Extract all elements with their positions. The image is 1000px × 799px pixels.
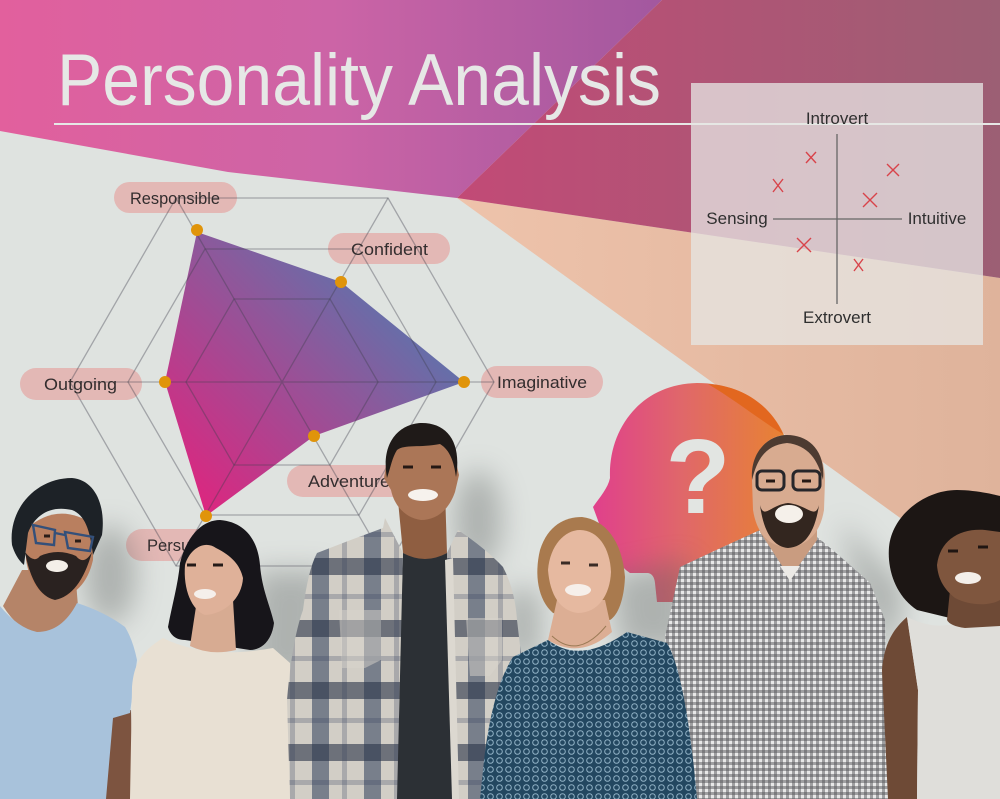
eyes [561, 563, 598, 565]
radar area [165, 232, 464, 516]
background panel: pink banner [0, 0, 662, 198]
wall shadows [84, 470, 905, 680]
quadrant labels: Extrovert [803, 308, 871, 327]
placket [445, 558, 459, 799]
pockets [339, 610, 502, 676]
title: Personality Analysis [57, 40, 661, 121]
background panel: crimson wedge [457, 0, 1000, 278]
radar labels [44, 189, 587, 555]
face [25, 514, 94, 599]
radar label pills [20, 182, 603, 561]
neck [3, 570, 78, 634]
radar labels: Outgoing [44, 375, 117, 394]
beard [760, 503, 819, 548]
radar labels: Responsible [130, 189, 220, 208]
neck [947, 590, 1000, 628]
eyes [187, 564, 223, 566]
neck [190, 600, 236, 652]
face [548, 530, 611, 613]
dress [480, 632, 697, 799]
dark t-shirt [395, 553, 454, 799]
glasses [757, 471, 784, 490]
blue shirt [0, 603, 137, 799]
smile [194, 589, 216, 599]
title underline [54, 123, 1000, 125]
smile [955, 572, 981, 584]
turban [12, 478, 103, 565]
hair [386, 423, 457, 478]
arm [104, 710, 133, 799]
quadrant panel [691, 83, 983, 345]
head [752, 435, 825, 547]
eyes [766, 480, 811, 482]
person 3: plaid shirt [287, 423, 524, 799]
beard [25, 552, 92, 600]
smile [565, 584, 591, 596]
background panel: peach wedge [457, 198, 1000, 590]
smile [775, 505, 803, 523]
hair back [168, 520, 274, 650]
arm [882, 617, 918, 799]
eyes [403, 466, 441, 468]
plaid shirt [287, 518, 403, 799]
person 1: turban and blue shirt [0, 478, 137, 799]
quadrant axes [773, 134, 902, 304]
people [0, 423, 1000, 799]
neck [548, 600, 612, 648]
icon: head with question mark [593, 383, 800, 602]
quadrant labels: Sensing [706, 209, 768, 228]
face [185, 545, 243, 615]
quadrant markers [773, 152, 899, 271]
radar labels: Confident [351, 240, 428, 259]
hair sides [752, 435, 823, 480]
quadrant labels [706, 109, 966, 327]
neck [760, 520, 817, 578]
head [384, 424, 459, 520]
quadrant chart [691, 83, 983, 345]
necklace [552, 626, 606, 646]
person 2: long black hair and cream sweater [130, 520, 292, 799]
glasses [33, 525, 93, 551]
person 6: curly hair and white dress [882, 490, 1000, 799]
radar points [159, 224, 470, 522]
person 4: auburn hair and patterned dress [480, 517, 697, 799]
radar labels: Persuasive [147, 536, 229, 555]
person 5: glasses and checked shirt [665, 435, 888, 799]
radar labels: Imaginative [497, 373, 587, 392]
radar grid [70, 198, 494, 566]
face [937, 530, 1000, 604]
smile [46, 560, 68, 572]
eyes [948, 547, 988, 551]
afro [889, 490, 1000, 618]
head fold [708, 384, 783, 434]
white dress [907, 617, 1000, 799]
quadrant labels: Intuitive [908, 209, 966, 228]
question mark: ? [666, 418, 730, 536]
sweater [130, 638, 292, 799]
checked shirt [665, 530, 888, 799]
smile [408, 489, 438, 501]
undershirt [780, 566, 800, 581]
plaid shirt right side [447, 530, 524, 799]
radar labels: Adventure [308, 472, 390, 491]
hair [537, 517, 625, 620]
eyes [44, 536, 81, 541]
neck [397, 490, 447, 565]
radar chart [20, 182, 603, 566]
quadrant labels: Introvert [806, 109, 868, 128]
